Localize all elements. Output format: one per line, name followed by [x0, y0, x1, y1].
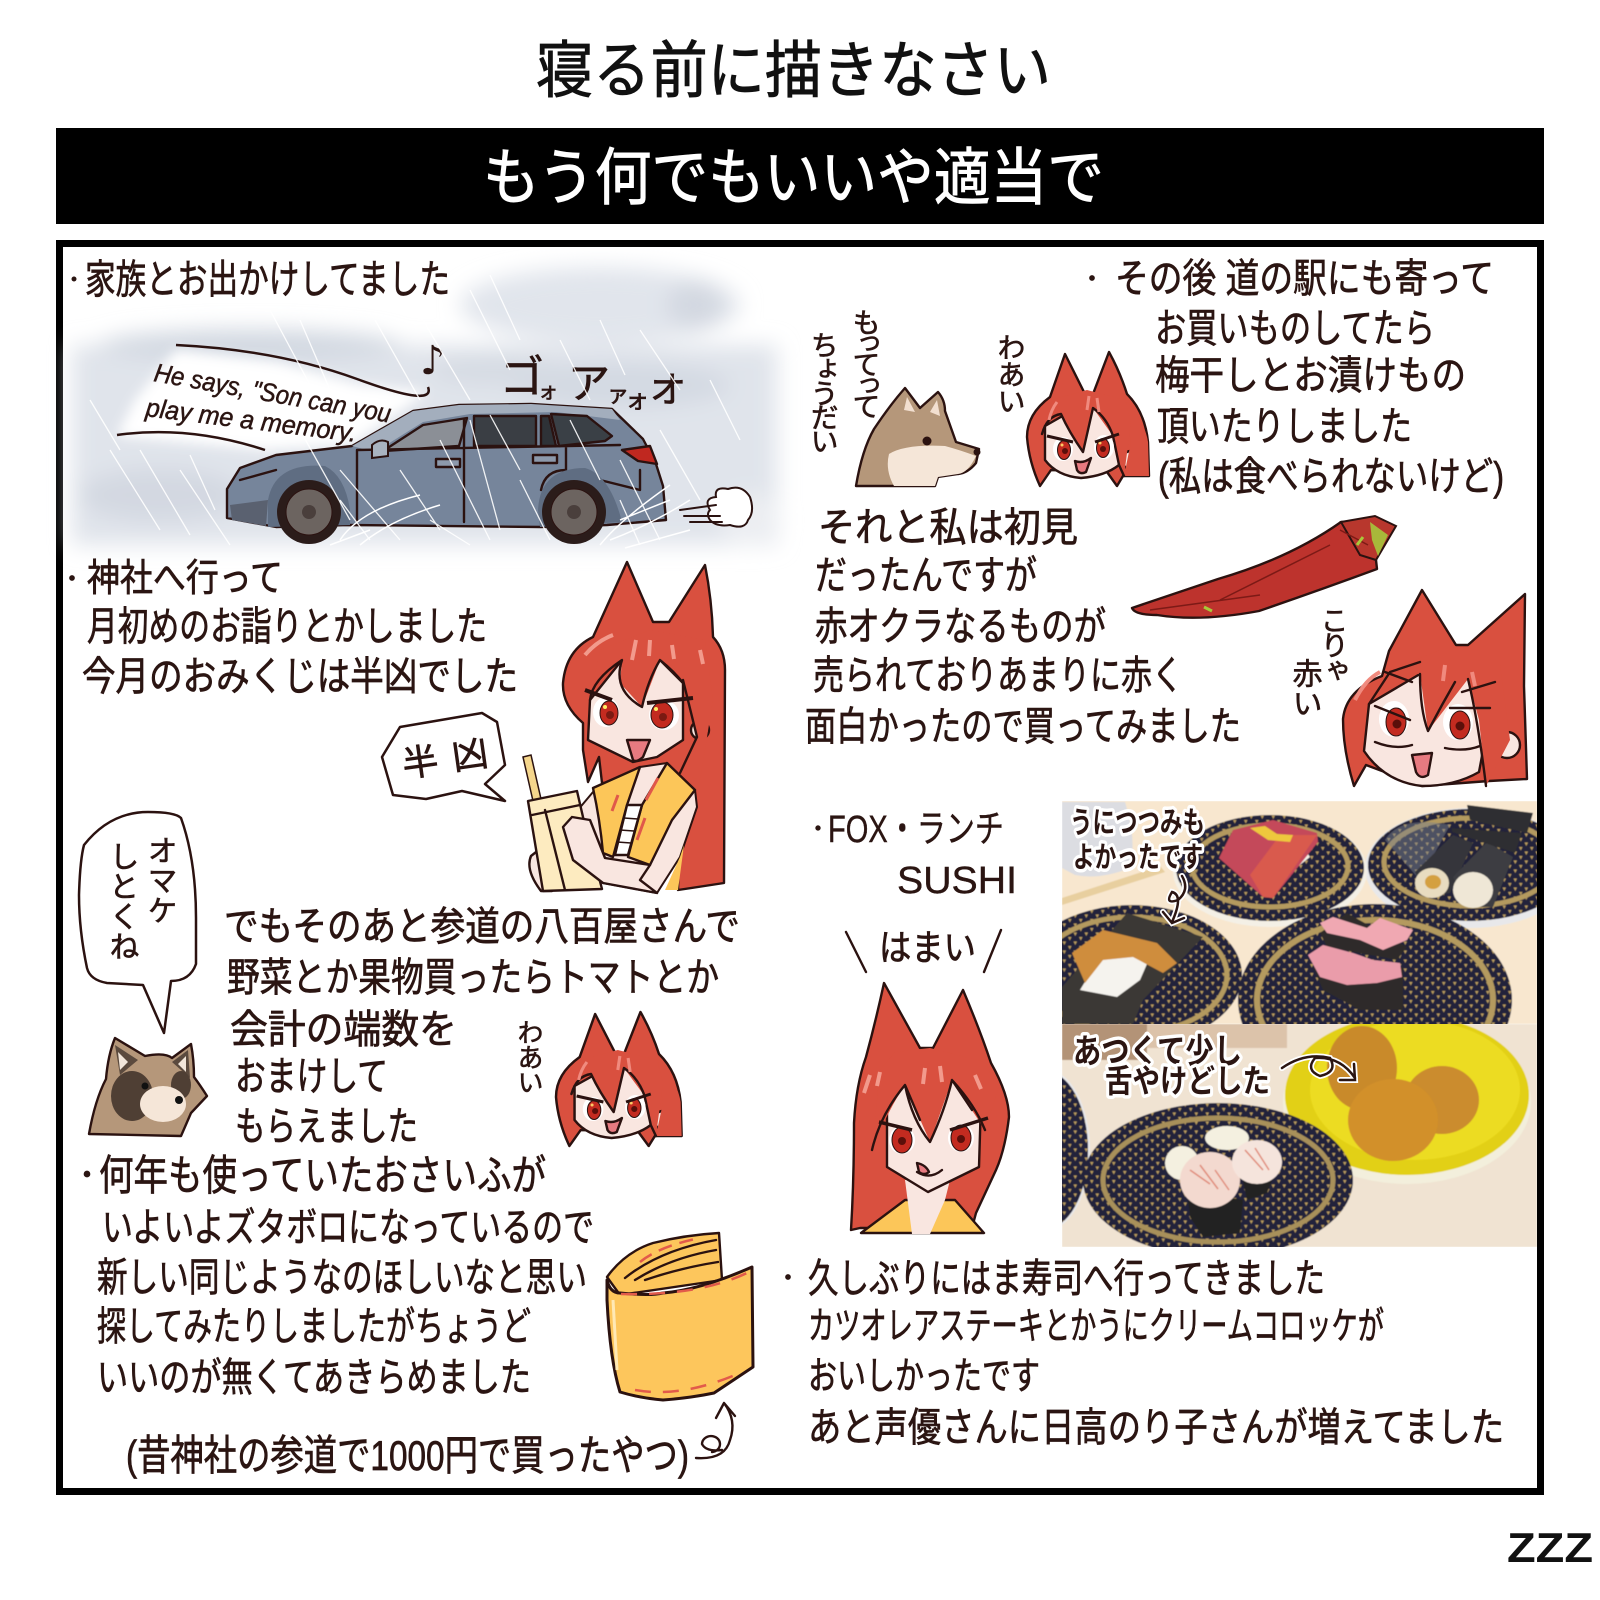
text: wallet: いよいよズタボロになっているので — [102, 1206, 594, 1250]
icon: music note: ♪ — [420, 338, 446, 384]
engine sound effect text: オ — [650, 369, 686, 410]
text: shrine visit: 神社へ行って — [87, 558, 283, 600]
fox girl head: happy — [1027, 352, 1149, 486]
speech bubble: half bad luck: 半 — [400, 740, 441, 785]
text: fox lunch sushi — [816, 809, 1017, 902]
text: family outing: 家族とお出かけしてました — [85, 258, 450, 302]
icon: red okra — [1132, 516, 1396, 618]
text: roadside station: その後 道の駅にも寄って — [1115, 257, 1494, 301]
text: red okra: 売られておりあまりに赤く — [813, 654, 1183, 698]
text: wallet: 新しい同じようなのほしいなと思い — [97, 1256, 587, 1300]
photo caption: hot tongue: 舌やけどした — [1105, 1063, 1270, 1099]
vertical text: korya akai: こりゃ — [1318, 606, 1348, 681]
text: roadside station: お買いものしてたら — [1155, 307, 1435, 351]
icon: wallet — [607, 1233, 753, 1400]
photo: croquettes and crab sushi — [1062, 1024, 1537, 1247]
text: greengrocer: もらえました — [235, 1105, 418, 1149]
text: shrine visit: 今月のおみくじは半凶でした — [82, 655, 518, 699]
text: wallet: いいのが無くてあきらめました — [97, 1356, 531, 1400]
main frame panel — [60, 244, 1540, 1492]
text: red okra: だったんですが — [815, 554, 1037, 598]
zzz mark: ZZZ — [1507, 1524, 1593, 1571]
song lyric text: play me a memory. — [143, 392, 358, 448]
icon: exhaust puff — [680, 488, 752, 527]
icon: tanuki — [89, 1038, 207, 1136]
vertical text: korya akai: 赤い — [1288, 658, 1322, 718]
engine sound effect text: ァ — [607, 382, 629, 407]
text: wallet: (昔神社の参道で1000円で買ったやつ) — [126, 1432, 689, 1479]
text: hama sushi — [786, 1257, 1504, 1450]
vertical text: dog speech: もってって — [850, 308, 880, 418]
title: 寝る前に描きなさい — [536, 37, 1051, 106]
text: red okra: 赤オクラなるものが — [815, 605, 1106, 649]
vertical text: wai 2: わあい — [514, 1019, 544, 1094]
text: red okra: それと私は初見 — [818, 506, 1078, 550]
speech bubble: omake — [79, 812, 196, 1033]
icon: dog — [856, 388, 980, 486]
fox girl head: large — [1343, 590, 1527, 786]
engine sound effect text: ォ — [625, 387, 649, 414]
black heading band: もう何でもいいや適当で — [483, 144, 1104, 213]
text: wallet: 探してみたりしましたがちょうど — [97, 1305, 531, 1349]
text: red okra: 面白かったので買ってみました — [805, 705, 1241, 749]
text: red okra — [805, 506, 1241, 749]
fox girl head: small — [556, 1012, 682, 1146]
text: wallet: 何年も使っていたおさいふが — [99, 1152, 546, 1199]
text: roadside station: 頂いたりしました — [1157, 405, 1412, 449]
engine sound effect text: ゴ — [500, 353, 544, 402]
vertical text: dog speech: ちょうだい — [808, 331, 838, 452]
speech swoosh lines — [117, 345, 429, 450]
vertical text: korya akai — [1288, 606, 1348, 718]
speech bubble: half bad luck: 凶 — [449, 733, 491, 778]
photo caption: uni: よかったです — [1073, 842, 1203, 874]
text: fox lunch sushi: FOX・ランチ — [828, 809, 1004, 851]
photo: sushi plates — [1062, 801, 1537, 1024]
engine sound effect text — [500, 353, 686, 414]
text: greengrocer — [224, 905, 740, 1149]
rain streaks and spray — [90, 275, 740, 545]
speech bubble: omake: オマケ — [142, 835, 176, 925]
fox girl holding omikuji box — [523, 562, 725, 893]
arrow: to uni sushi — [1163, 876, 1185, 923]
engine sound effect text: ア — [568, 360, 610, 407]
car illustration — [227, 404, 666, 544]
engine sound effect text: ォ — [538, 381, 558, 403]
photo caption: uni — [1070, 807, 1205, 874]
text: hama sushi: 久しぶりにはま寿司へ行ってきました — [808, 1257, 1325, 1301]
exclamation: hamai: はまい — [879, 927, 976, 968]
text: greengrocer: でもそのあと参道の八百屋さんで — [224, 905, 740, 949]
rainy background clouds — [72, 267, 780, 546]
vertical text: wai: わあい — [994, 333, 1026, 414]
song lyric text: He says, "Son can you — [152, 357, 394, 429]
text: hama sushi: おいしかったです — [808, 1356, 1040, 1398]
text: greengrocer: 会計の端数を — [230, 1008, 457, 1052]
text: wallet — [84, 1152, 689, 1479]
text: roadside station: (私は食べられないけど) — [1158, 455, 1504, 499]
text: roadside station: 梅干しとお漬けもの — [1155, 354, 1466, 398]
text: greengrocer: 野菜とか果物買ったらトマトとか — [227, 956, 719, 1000]
photo caption: uni: うにつつみも — [1070, 807, 1205, 840]
arrow: to wallet — [696, 1403, 735, 1458]
text: shrine visit: 月初めのお詣りとかしました — [87, 605, 487, 649]
text: greengrocer: おまけして — [235, 1055, 388, 1099]
text: shrine visit — [70, 558, 518, 699]
vertical text: dog speech — [808, 308, 880, 452]
exclamation: hamai — [846, 927, 1001, 972]
text: roadside station — [1090, 257, 1504, 499]
speech bubble: omake: しとくね — [104, 841, 138, 961]
fox girl licking lips — [851, 983, 1009, 1234]
photo caption: hot tongue — [1073, 1033, 1270, 1099]
black heading band — [56, 128, 1544, 224]
speech bubble: half bad luck — [382, 713, 505, 801]
arrow: to croquette — [1282, 1056, 1355, 1080]
photo caption: hot tongue: あつくて少し — [1073, 1033, 1242, 1071]
text: fox lunch sushi: SUSHI — [897, 860, 1017, 902]
